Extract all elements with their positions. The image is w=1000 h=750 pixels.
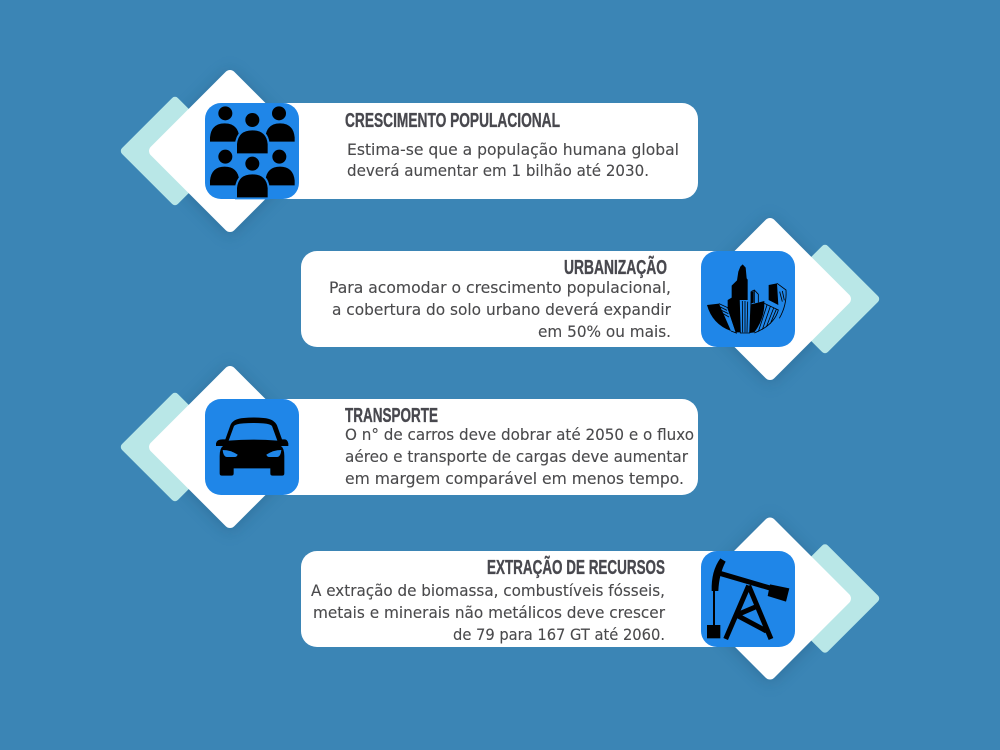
icon: group of people xyxy=(205,103,299,199)
heading: URBANIZAÇÃO xyxy=(564,256,667,279)
body text xyxy=(345,425,694,488)
body text: em 50% ou mais. xyxy=(538,322,671,341)
diamond shadow xyxy=(687,517,853,684)
teal diamond xyxy=(119,391,231,503)
icon: car xyxy=(205,399,299,495)
text card xyxy=(301,251,795,347)
panel: transporte xyxy=(119,364,698,532)
heading: EXTRAÇÃO DE RECURSOS xyxy=(487,556,665,579)
body text: Estima-se que a população humana global xyxy=(347,140,679,159)
white diamond xyxy=(147,364,313,530)
panel: crescimento populacional xyxy=(119,68,698,236)
body text: A extração de biomassa, combustíveis fósseis, xyxy=(311,581,665,600)
body text: metais e minerais não metálicos deve crescer xyxy=(313,603,665,622)
body text xyxy=(311,581,665,644)
text card xyxy=(205,399,698,495)
white diamond xyxy=(147,68,313,234)
teal diamond xyxy=(769,543,881,654)
white diamond xyxy=(687,216,853,382)
text card xyxy=(205,103,698,199)
heading: CRESCIMENTO POPULACIONAL xyxy=(345,110,560,132)
diamond shadow xyxy=(147,366,313,532)
icon: city skyline xyxy=(701,251,795,347)
body text: Para acomodar o crescimento populacional, xyxy=(329,278,671,297)
panel: urbanização xyxy=(301,216,881,384)
diamond shadow xyxy=(687,218,853,384)
body text: a cobertura do solo urbano deverá expandir xyxy=(332,300,671,319)
diamond shadow xyxy=(147,70,313,236)
body text: deverá aumentar em 1 bilhão até 2030. xyxy=(347,161,649,180)
panel: extração de recursos xyxy=(301,515,881,684)
white diamond xyxy=(687,515,853,682)
body text: de 79 para 167 GT até 2060. xyxy=(453,625,665,644)
body text xyxy=(347,140,679,180)
body text xyxy=(329,278,671,341)
heading: TRANSPORTE xyxy=(345,405,438,427)
body text: aéreo e transporte de cargas deve aumentar xyxy=(345,447,688,466)
teal diamond xyxy=(769,243,881,355)
icon: oil pump xyxy=(701,551,795,647)
text card xyxy=(301,551,795,647)
body text: em margem comparável em menos tempo. xyxy=(345,469,684,488)
teal diamond xyxy=(119,95,231,207)
body text: O n° de carros deve dobrar até 2050 e o fluxo xyxy=(345,425,694,444)
